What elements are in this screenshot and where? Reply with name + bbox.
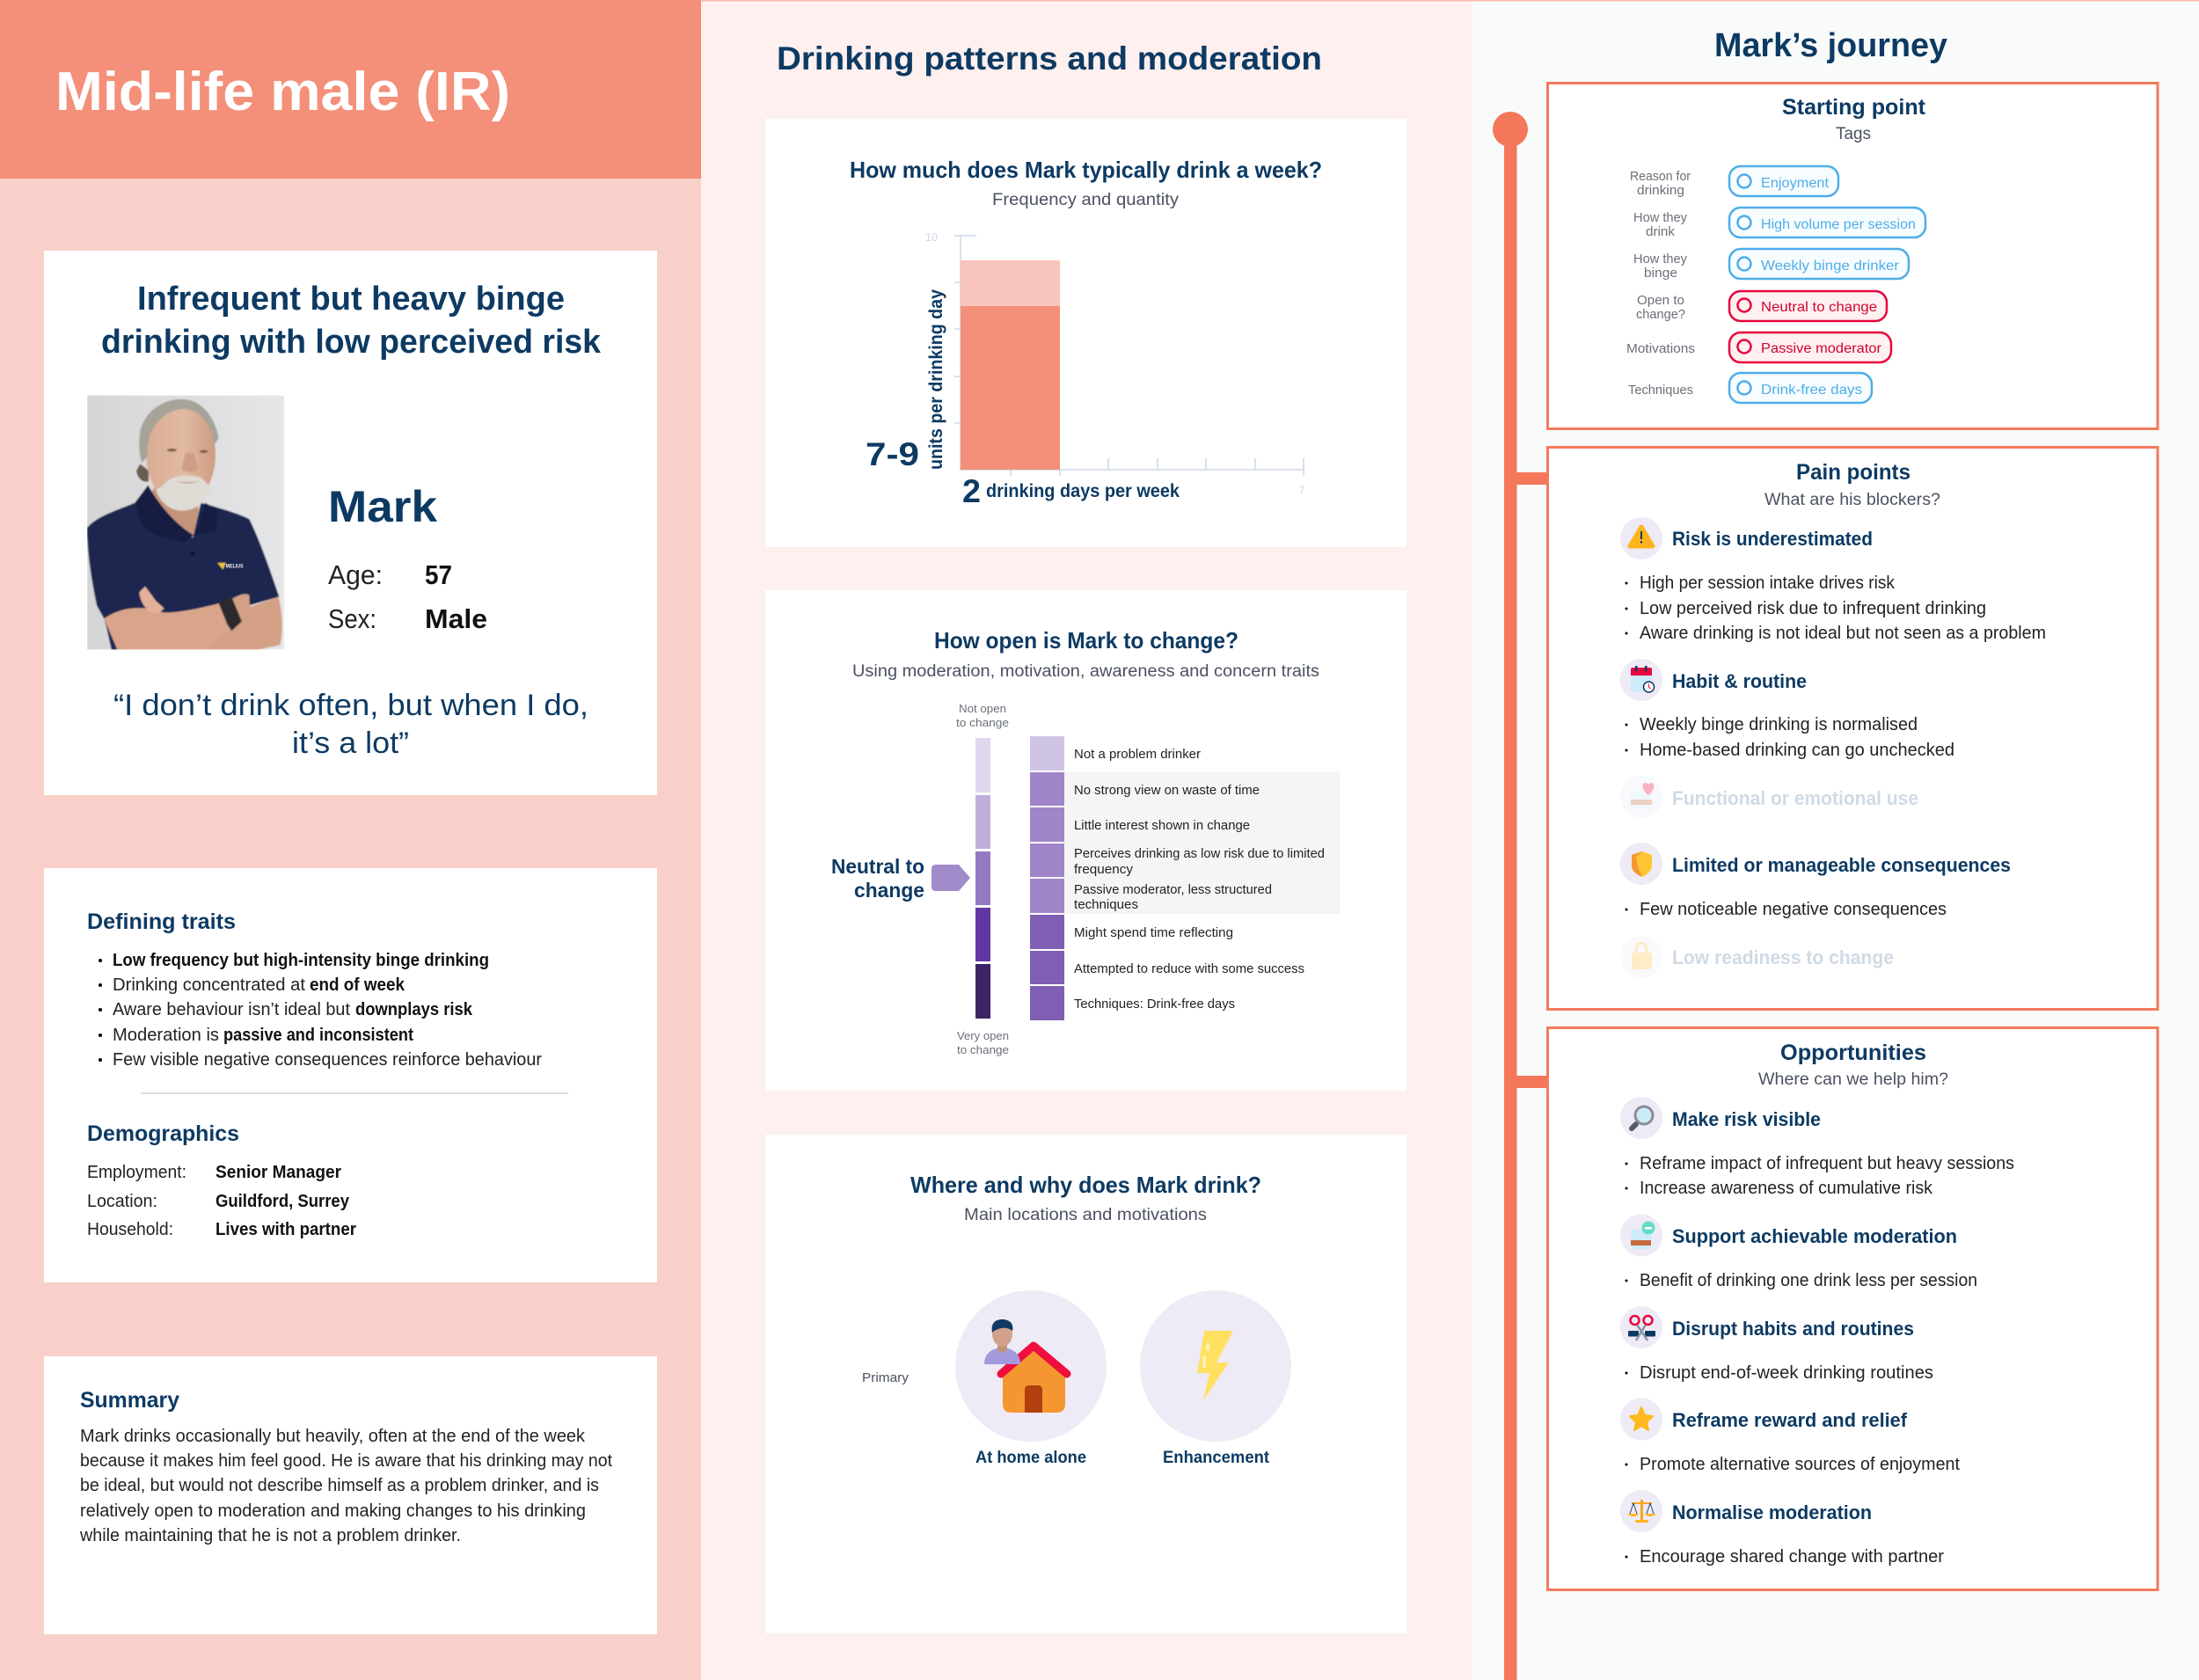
persona quote: “I don’t drink often, but when I do,: [113, 689, 588, 722]
summary text: because it makes him feel good. He is aware that his drinking may not: [80, 1451, 612, 1471]
tag: weekly binge: Weekly binge drinker: [1761, 259, 1900, 274]
scale bottom label: Very open: [957, 1029, 1009, 1042]
icon: lock, faded: [1620, 936, 1662, 978]
tag labels: Open to: [1637, 293, 1684, 308]
tag: neutral to change: [1729, 291, 1887, 321]
list: defining traits: end of week: [310, 975, 405, 995]
demographics table: Senior Manager: [216, 1163, 341, 1182]
x axis label: drinking days per week: [986, 481, 1180, 501]
icon label: At home alone: [975, 1449, 1086, 1467]
opportunity: make risk visible: Reframe impact of infrequent but heavy sessions: [1640, 1154, 2014, 1173]
arrow: pointer: [931, 865, 970, 891]
scale top label: Not open: [959, 702, 1006, 715]
tag labels: Motivations: [1626, 341, 1695, 356]
pain point: functional use, faded: Functional or emotional use: [1672, 787, 1918, 809]
list: defining traits: Moderation is: [113, 1026, 219, 1045]
list: defining traits: passive and inconsistent: [223, 1026, 413, 1045]
tag labels: How they: [1633, 252, 1687, 267]
traits list: Passive moderator, less structured: [1074, 882, 1272, 897]
icon: glass and heart, faded: [1620, 776, 1662, 818]
bar chart: 7: [1299, 484, 1304, 497]
chart subheading: Using moderation, motivation, awareness and concern traits: [852, 662, 1319, 681]
panel: middle column: [701, 0, 1472, 1680]
tag: enjoyment: Enjoyment: [1761, 176, 1830, 191]
icon: calendar: [1620, 659, 1662, 701]
panel: starting point: [1548, 83, 2158, 429]
opportunity: achievable moderation: [1626, 1225, 1977, 1290]
tag labels: Techniques: [1628, 383, 1693, 398]
pain point: risk: [1626, 528, 2046, 643]
list: defining traits: [99, 951, 542, 1070]
scale bottom label: [957, 1029, 1009, 1056]
opportunity: reframe reward: Reframe reward and relief: [1672, 1409, 1908, 1431]
heading: demographics: Demographics: [87, 1121, 239, 1146]
opportunity: disrupt habits: Disrupt end-of-week drinking routines: [1640, 1363, 1933, 1383]
demographics table: Guildford, Surrey: [216, 1192, 350, 1211]
pain point: consequences: Few noticeable negative consequences: [1640, 900, 1947, 919]
pain point: low readiness, faded: Low readiness to change: [1672, 946, 1894, 968]
panel: right column: [1472, 0, 2199, 1680]
list: defining traits: Drinking concentrated at: [113, 975, 305, 995]
x value: 2: [962, 473, 981, 509]
y axis label: units per drinking day: [926, 289, 946, 470]
tag: passive moderator: [1729, 332, 1891, 362]
tag: neutral to change: Neutral to change: [1761, 300, 1877, 315]
icon: star: [1620, 1399, 1662, 1441]
opportunity: make risk visible: [1626, 1108, 2014, 1198]
traits list: Might spend time reflecting: [1074, 925, 1233, 940]
tag labels: drinking: [1637, 183, 1684, 198]
panel: defining traits and demographics: [44, 868, 657, 1282]
subheading: Where can we help him?: [1758, 1070, 1948, 1089]
demographics table: Lives with partner: [216, 1220, 356, 1239]
summary text: Mark drinks occasionally but heavily, often at the end of the week: [80, 1427, 586, 1446]
summary text: relatively open to moderation and making changes to his drinking: [80, 1501, 586, 1521]
demographics table: Location:: [87, 1192, 157, 1211]
chart heading: Where and why does Mark drink?: [910, 1172, 1261, 1198]
traits list: [1030, 736, 1340, 1020]
persona name: Mark: [328, 482, 437, 531]
icon: lightning bolt: [1140, 1290, 1291, 1442]
opportunity: normalise moderation: [1626, 1501, 1944, 1567]
icon: scales: [1620, 1490, 1662, 1532]
tag labels: Reason for: [1630, 169, 1691, 184]
icon label: Enhancement: [1163, 1449, 1270, 1467]
panel: persona card: [44, 251, 657, 795]
persona headline: Infrequent but heavy binge: [137, 281, 565, 318]
timeline: [1493, 112, 1548, 1680]
header band: [0, 0, 701, 179]
tag labels: [1626, 169, 1695, 398]
demographics table: [87, 1163, 356, 1239]
openness scale: [975, 738, 990, 1019]
summary text: [79, 1427, 612, 1545]
pain point: risk: Low perceived risk due to infrequent drinking: [1640, 599, 1986, 618]
chart subheading: Frequency and quantity: [992, 191, 1180, 209]
traits list: No strong view on waste of time: [1074, 783, 1260, 798]
summary text: while maintaining that he is not a problem drinker.: [79, 1526, 461, 1545]
scale top label: to change: [956, 716, 1009, 729]
callout: neutral to change: [831, 855, 970, 902]
pain point: habit: Home-based drinking can go unchecked: [1640, 741, 1954, 760]
opportunity: normalise moderation: Encourage shared change with partner: [1640, 1547, 1944, 1567]
traits list: Techniques: Drink-free days: [1074, 997, 1235, 1012]
heading: defining traits: Defining traits: [87, 909, 236, 934]
tag: high volume: [1729, 208, 1925, 237]
opportunity: disrupt habits: [1626, 1318, 1933, 1383]
panel: left column: [0, 0, 701, 1680]
photo of Mark: [87, 395, 284, 650]
panel: pain points: [1548, 447, 2158, 1010]
section heading: Drinking patterns and moderation: [777, 40, 1322, 77]
panel: opportunities: [1548, 1027, 2158, 1590]
pain point: consequences: [1626, 854, 2011, 919]
subheading: Tags: [1836, 125, 1871, 143]
persona headline: [101, 281, 602, 361]
callout: neutral to change: Neutral to: [831, 855, 924, 878]
persona age and sex: Age:: [328, 559, 383, 590]
chart subheading: Main locations and motivations: [964, 1206, 1207, 1224]
demographics table: Household:: [87, 1220, 173, 1239]
tag: drink-free days: [1729, 373, 1872, 403]
panel: how much does Mark drink: [765, 119, 1406, 547]
tag: passive moderator: Passive moderator: [1761, 341, 1882, 356]
bar chart: 10: [925, 230, 938, 244]
y value: 7-9: [866, 436, 919, 472]
chart heading: How much does Mark typically drink a week?: [850, 157, 1322, 183]
tag labels: binge: [1644, 266, 1677, 281]
list: defining traits: Few visible negative consequences reinforce behaviour: [113, 1050, 542, 1070]
tag: enjoyment: [1729, 166, 1838, 196]
tag: weekly binge: [1729, 249, 1909, 279]
traits list: techniques: [1074, 897, 1138, 912]
row label: Primary: [862, 1370, 910, 1385]
bar chart: [866, 230, 1304, 509]
opportunity: reframe reward: Promote alternative sources of enjoyment: [1640, 1455, 1960, 1474]
opportunity: make risk visible: Increase awareness of cumulative risk: [1640, 1179, 1933, 1198]
traits list: Perceives drinking as low risk due to limited: [1074, 846, 1325, 861]
tag: high volume: High volume per session: [1761, 217, 1916, 232]
tag labels: How they: [1633, 210, 1687, 225]
opportunity: achievable moderation: Benefit of drinking one drink less per session: [1640, 1271, 1977, 1290]
photo of Mark: MELIUS: [226, 564, 244, 570]
icon: scissors: [1620, 1306, 1662, 1348]
list: defining traits: downplays risk: [355, 1000, 473, 1019]
heading: Opportunities: [1780, 1041, 1926, 1065]
persona quote: [113, 689, 588, 760]
opportunity: reframe reward: [1626, 1409, 1960, 1474]
icon: shield: [1620, 843, 1662, 885]
scale bottom label: to change: [957, 1043, 1009, 1056]
icon: warning: [1620, 517, 1662, 559]
summary text: be ideal, but would not describe himself as a problem drinker, and is: [80, 1476, 599, 1495]
heading: Starting point: [1782, 95, 1926, 120]
traits list: Attempted to reduce with some success: [1074, 961, 1304, 976]
persona age and sex: 57: [425, 559, 452, 590]
pain point: risk: Risk is underestimated: [1672, 528, 1873, 550]
traits list: Not a problem drinker: [1074, 747, 1201, 762]
pain point: habit: Habit & routine: [1672, 670, 1807, 692]
persona age and sex: Sex:: [328, 603, 376, 634]
heading: Pain points: [1796, 460, 1910, 485]
opportunity: disrupt habits: Disrupt habits and routines: [1672, 1318, 1914, 1340]
pain point: risk: Aware drinking is not ideal but not seen as a problem: [1640, 624, 2046, 643]
panel: how open is Mark to change: [765, 590, 1406, 1091]
pain point: habit: [1626, 670, 1954, 760]
icon: glass with minus: [1620, 1214, 1662, 1256]
tag labels: change?: [1636, 307, 1685, 322]
panel: summary: [44, 1356, 657, 1634]
chart heading: How open is Mark to change?: [934, 627, 1238, 654]
icon: at home alone: [955, 1290, 1107, 1442]
persona age and sex: [328, 559, 487, 634]
callout: neutral to change: change: [854, 879, 924, 902]
title: Mid-life male (IR): [55, 62, 510, 122]
icon: magnifier: [1620, 1097, 1662, 1139]
persona quote: it’s a lot”: [292, 727, 409, 760]
list: defining traits: Low frequency but high-intensity binge drinking: [113, 951, 489, 970]
opportunity: make risk visible: Make risk visible: [1672, 1108, 1821, 1130]
pain point: habit: Weekly binge drinking is normalised: [1640, 715, 1918, 734]
tag labels: drink: [1646, 224, 1676, 239]
panel: where and why: [765, 1135, 1406, 1633]
pain point: risk: High per session intake drives risk: [1640, 573, 1896, 593]
traits list: Little interest shown in change: [1074, 818, 1250, 833]
demographics table: Employment:: [87, 1163, 186, 1182]
persona age and sex: Male: [425, 603, 487, 634]
subheading: What are his blockers?: [1764, 491, 1940, 509]
scale top label: [956, 702, 1009, 729]
list: defining traits: Aware behaviour isn’t ideal but: [113, 1000, 350, 1019]
opportunity: normalise moderation: Normalise moderation: [1672, 1501, 1872, 1523]
pain point: consequences: Limited or manageable consequences: [1672, 854, 2011, 876]
persona headline: drinking with low perceived risk: [101, 324, 602, 361]
opportunity: achievable moderation: Support achievable moderation: [1672, 1225, 1957, 1247]
tag: drink-free days: Drink-free days: [1761, 383, 1862, 398]
section heading: Mark’s journey: [1714, 27, 1947, 64]
heading: summary: Summary: [80, 1388, 179, 1413]
traits list: frequency: [1074, 862, 1134, 877]
